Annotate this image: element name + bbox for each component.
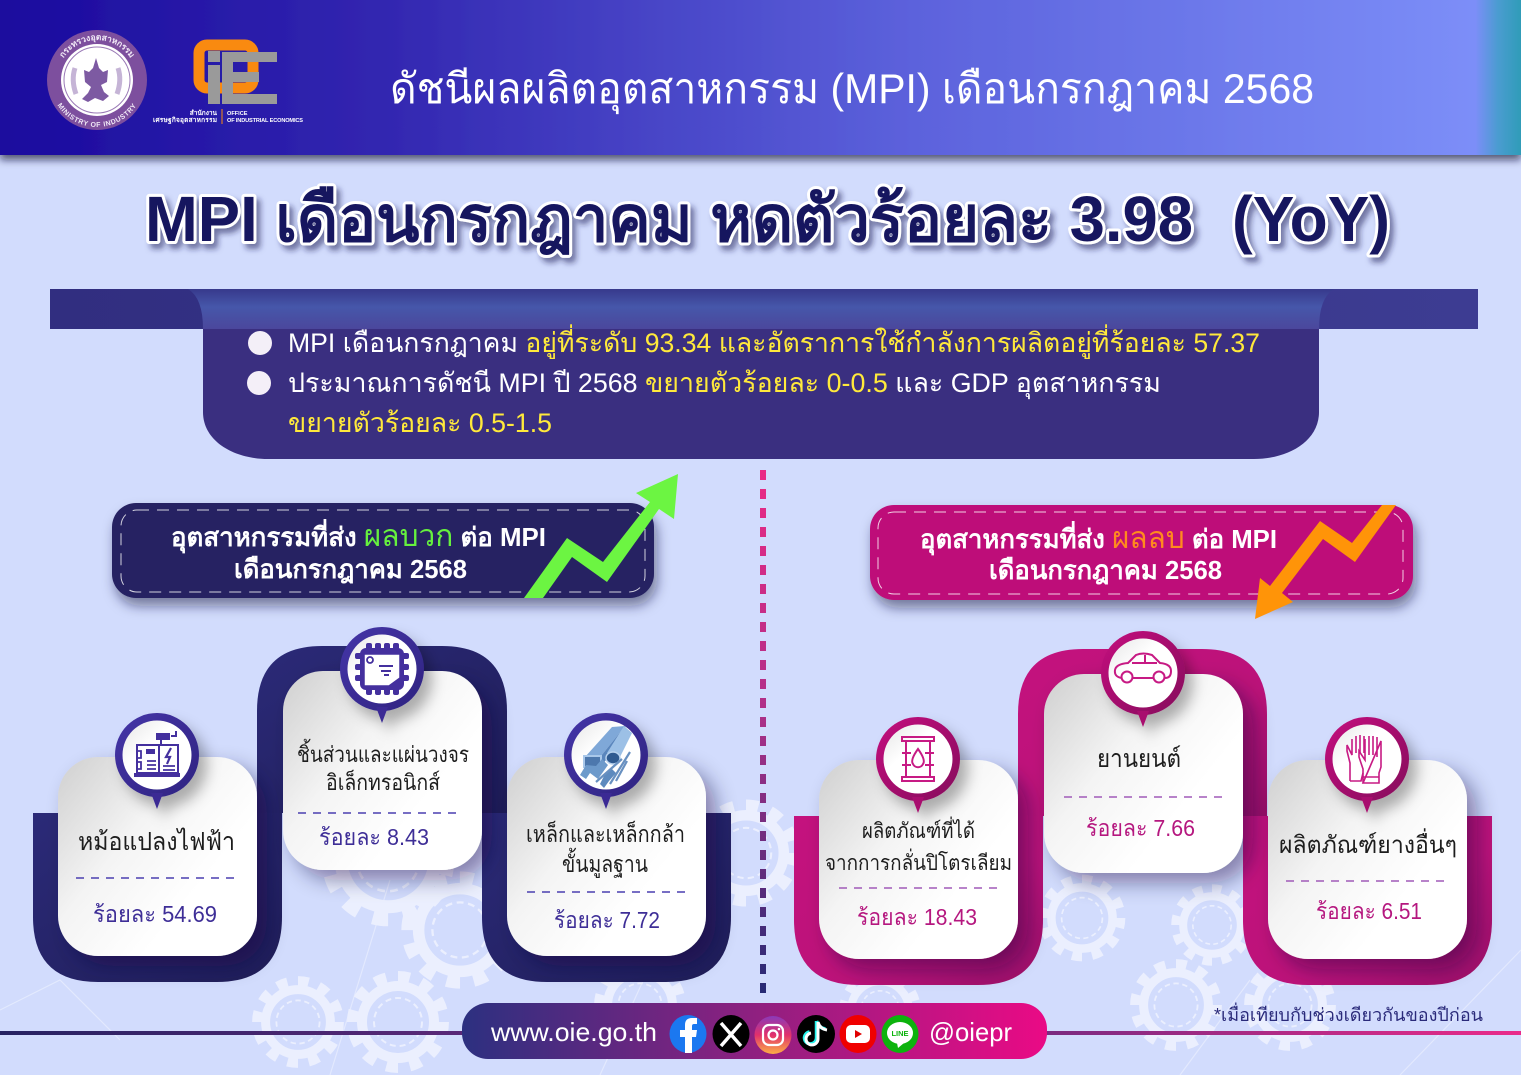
left connector dots	[0, 511, 112, 517]
card: other rubber products: ผลิตภัณฑ์ยางอื่นๆ	[1279, 828, 1457, 859]
icon: youtube	[840, 1015, 876, 1053]
card: other rubber products: ร้อยละ 6.51	[1316, 898, 1422, 924]
card: refined petroleum: ผลิตภัณฑ์ที่ได้	[862, 816, 975, 843]
card: electronic components: อิเล็กทรอนิกส์	[326, 768, 441, 795]
footer line left	[0, 1031, 465, 1035]
negative heading pill	[870, 505, 1413, 600]
main headline: MPI เดือนกรกฎาคม หดตัวร้อยละ 3.98	[145, 183, 1193, 255]
icon: oil barrel	[876, 717, 960, 813]
summary line 1: MPI เดือนกรกฎาคม อยู่ที่ระดับ 93.34 และอัตราการใช้กำลังการผลิตอยู่ที่ร้อยละ 57.37	[288, 324, 1260, 359]
card: electronic components: ร้อยละ 8.43	[319, 824, 429, 850]
icon: X	[712, 1015, 750, 1053]
card: refined petroleum: ร้อยละ 18.43	[857, 904, 977, 930]
left backing bands	[33, 646, 731, 982]
logo: OIE: OFFICE	[227, 111, 248, 117]
card: iron and steel: ขั้นมูลฐาน	[562, 848, 648, 878]
icon: car	[1101, 631, 1185, 727]
logo: Ministry of Industry seal: กระทรวงอุตสาหกรรม	[60, 35, 134, 58]
logo: Ministry of Industry seal: MINISTRY OF INDUSTRY	[58, 102, 136, 127]
card: iron and steel: เหล็กและเหล็กกล้า	[526, 819, 685, 847]
card: iron and steel: ร้อยละ 7.72	[554, 907, 660, 933]
card: electrical transformers: ร้อยละ 54.69	[93, 901, 217, 927]
summary line 3: ขยายตัวร้อยละ 0.5-1.5	[288, 408, 552, 438]
footer line right	[1045, 1031, 1521, 1035]
center divider	[760, 470, 766, 1000]
right connector dots	[1423, 516, 1521, 522]
icon: steel bars	[564, 713, 648, 809]
logo: OIE	[153, 45, 303, 125]
icon: facebook	[670, 1015, 706, 1053]
positive heading pill	[112, 503, 654, 598]
icon: generator	[115, 713, 199, 809]
icon: orange down arrow	[1255, 505, 1396, 619]
right backing bands	[794, 649, 1492, 985]
card: other rubber products	[1268, 760, 1467, 959]
logo: Ministry of Industry seal	[47, 30, 147, 130]
footer social pill	[462, 1003, 1047, 1059]
handle: @oiepr	[929, 1017, 1012, 1047]
icon: green up arrow	[524, 474, 678, 598]
card: automobiles: ร้อยละ 7.66	[1086, 815, 1195, 841]
positive heading pill: อุตสาหกรรมที่ส่ง ผลบวก ต่อ MPI	[171, 518, 546, 554]
icon: line: LINE	[891, 1029, 909, 1038]
footnote: *เมื่อเทียบกับช่วงเดียวกันของปีก่อน	[1214, 1002, 1483, 1025]
negative heading pill: เดือนกรกฎาคม 2568	[989, 555, 1222, 585]
icon: circuit chip	[340, 627, 424, 723]
card: electronic components: ชิ้นส่วนและแผ่นวงจร	[297, 739, 469, 767]
icon: instagram	[754, 1016, 792, 1054]
logo: OIE: OF INDUSTRIAL ECONOMICS	[227, 118, 303, 124]
card: electrical transformers: หม้อแปลงไฟฟ้า	[78, 827, 235, 856]
card: refined petroleum: จากการกลั่นปิโตรเลียม	[825, 848, 1012, 875]
logo: OIE: สำนักงาน	[190, 109, 218, 117]
background gears	[0, 760, 1521, 1075]
main headline: (YoY)	[1232, 183, 1390, 255]
icon: rubber gloves	[1325, 717, 1409, 813]
bullet 1	[248, 331, 272, 355]
positive heading pill: เดือนกรกฎาคม 2568	[234, 554, 467, 584]
header banner	[0, 0, 1521, 166]
card: electrical transformers	[58, 757, 257, 956]
icon: tiktok	[797, 1015, 835, 1053]
card: iron and steel	[507, 757, 706, 956]
card: automobiles	[1044, 674, 1243, 873]
summary panel	[50, 289, 1478, 459]
summary line 2: ประมาณการดัชนี MPI ปี 2568 ขยายตัวร้อยละ 0-0.5 และ GDP อุตสาหกรรม	[288, 368, 1161, 400]
logo: OIE: เศรษฐกิจอุตสาหกรรม	[153, 116, 217, 125]
bullet 2	[247, 371, 271, 395]
icon: line	[882, 1015, 918, 1053]
negative heading pill: อุตสาหกรรมที่ส่ง ผลลบ ต่อ MPI	[920, 520, 1277, 556]
card: automobiles: ยานยนต์	[1097, 745, 1181, 773]
website: www.oie.go.th	[490, 1017, 657, 1047]
header title: ดัชนีผลผลิตอุตสาหกรรม (MPI) เดือนกรกฎาคม 2568	[390, 65, 1314, 115]
card: electronic components	[283, 671, 482, 870]
card: refined petroleum	[819, 760, 1018, 959]
